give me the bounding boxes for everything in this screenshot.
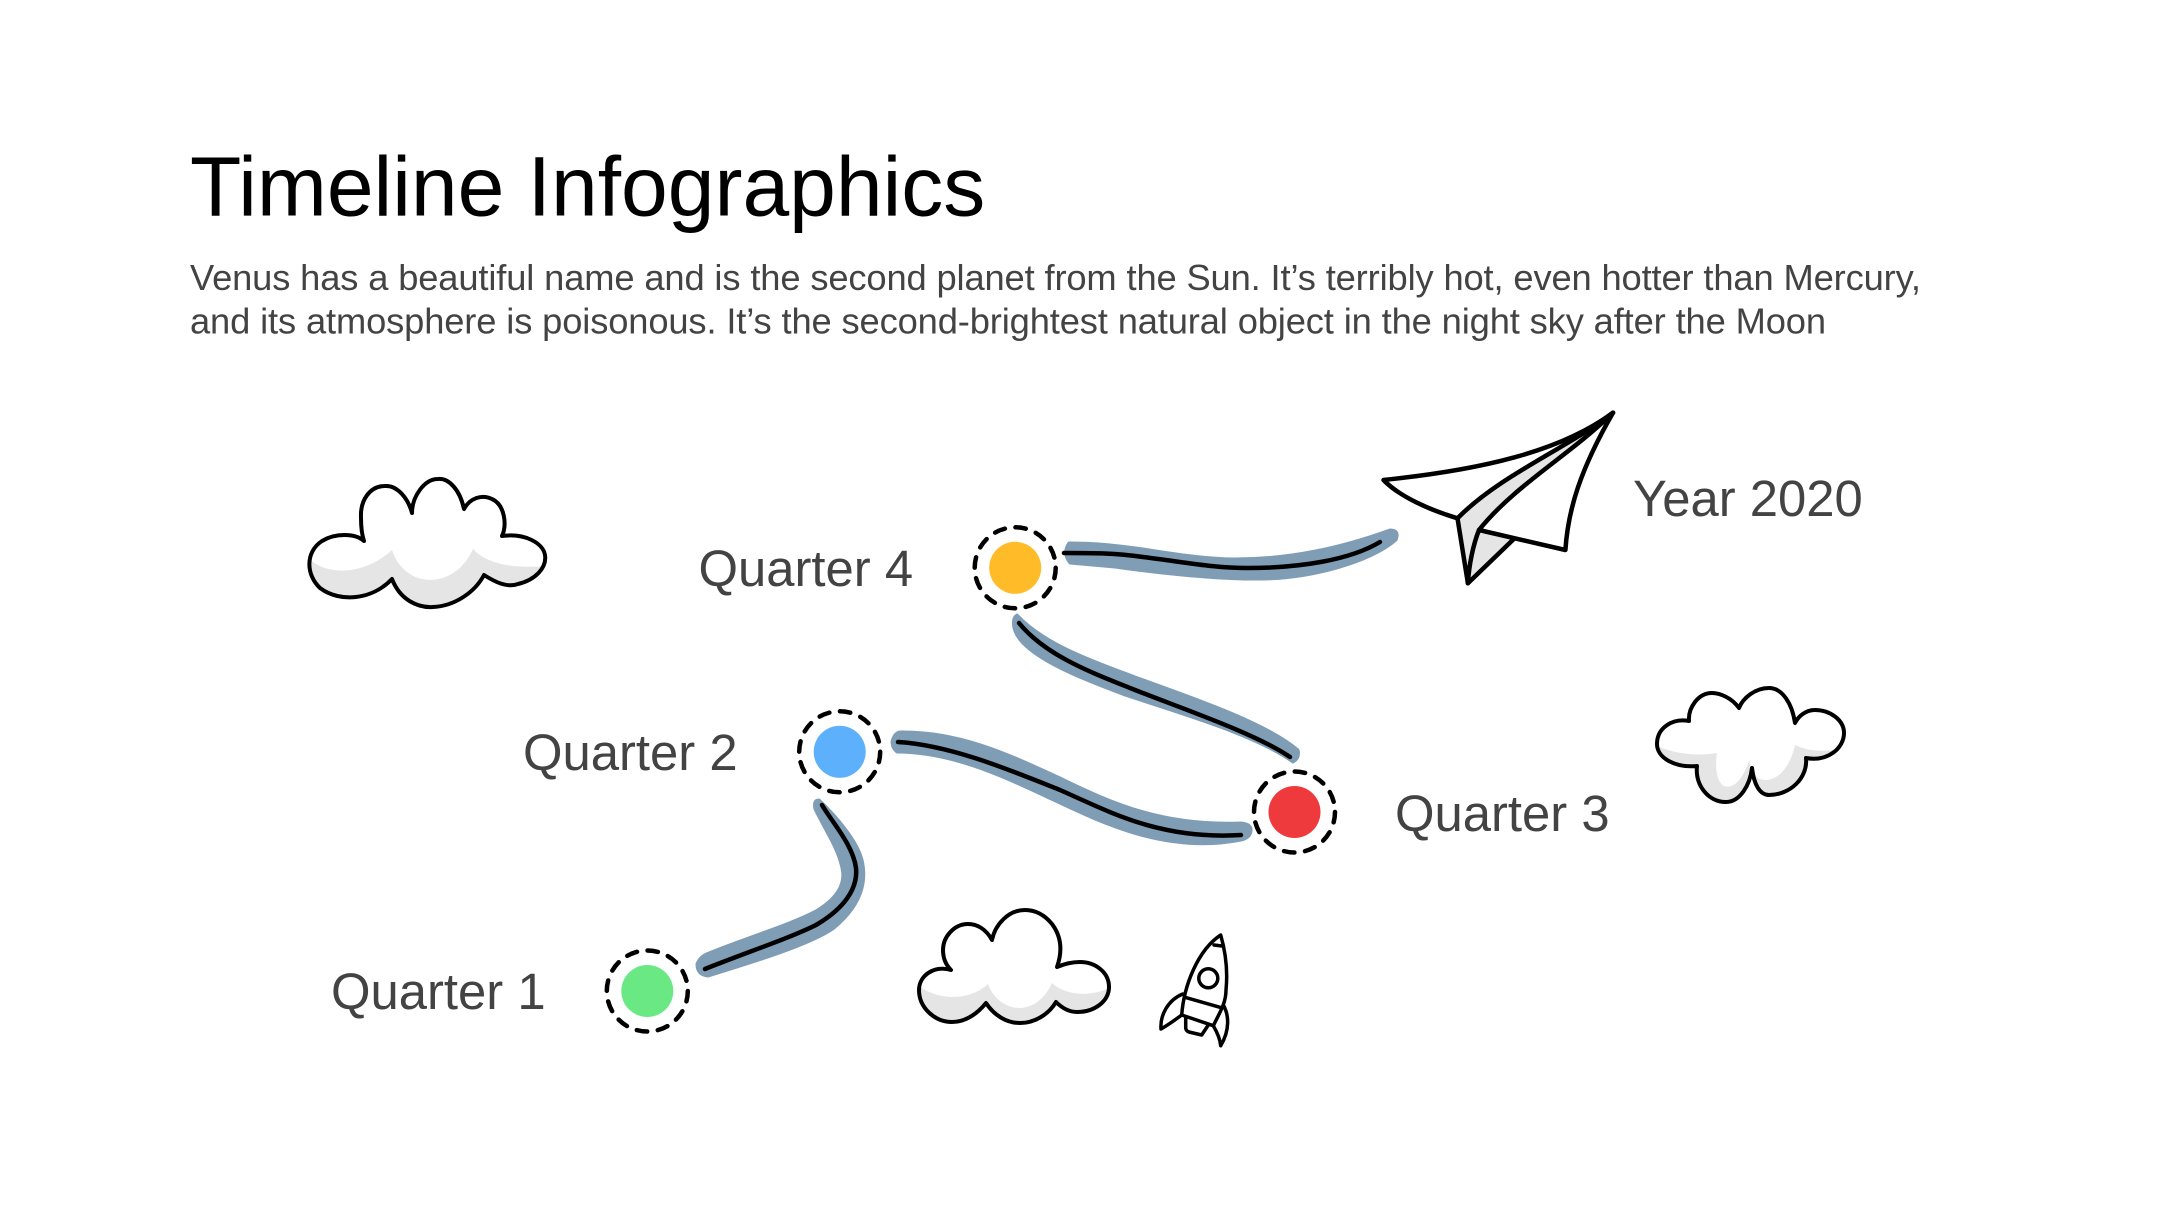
description text: and its atmosphere is poisonous. It’s the second-brightest natural object in the night sky after the Moon: [190, 300, 1826, 341]
connector: quarter 1 to quarter 2: [697, 800, 864, 976]
icon: rocket: [1161, 935, 1228, 1046]
icon: cloud right: [1650, 688, 1845, 810]
label: quarter 2: Quarter 2: [523, 724, 738, 781]
label: quarter 1: Quarter 1: [331, 963, 546, 1020]
milestone: quarter 3: [1254, 772, 1335, 852]
milestone: quarter 1: [607, 950, 688, 1032]
milestone: quarter 4: [975, 527, 1056, 608]
description text: [190, 257, 1921, 341]
connector: quarter 2 to quarter 3: [892, 732, 1251, 844]
label: quarter 4: Quarter 4: [698, 540, 913, 597]
description text: Venus has a beautiful name and is the second planet from the Sun. It’s terribly hot, even hotter than Mercury,: [190, 257, 1921, 298]
milestone: quarter 2: [799, 711, 880, 792]
connector: quarter 4 to plane: [1064, 530, 1397, 579]
icon: paper plane: [1384, 413, 1613, 583]
connector: quarter 3 to quarter 4: [1013, 615, 1298, 762]
icon: cloud bottom: [915, 910, 1112, 1028]
title: Timeline Infographics: [190, 140, 985, 234]
label: quarter 3: Quarter 3: [1395, 785, 1610, 842]
icon: cloud top left: [300, 479, 550, 615]
label: year 2020: Year 2020: [1633, 470, 1863, 527]
